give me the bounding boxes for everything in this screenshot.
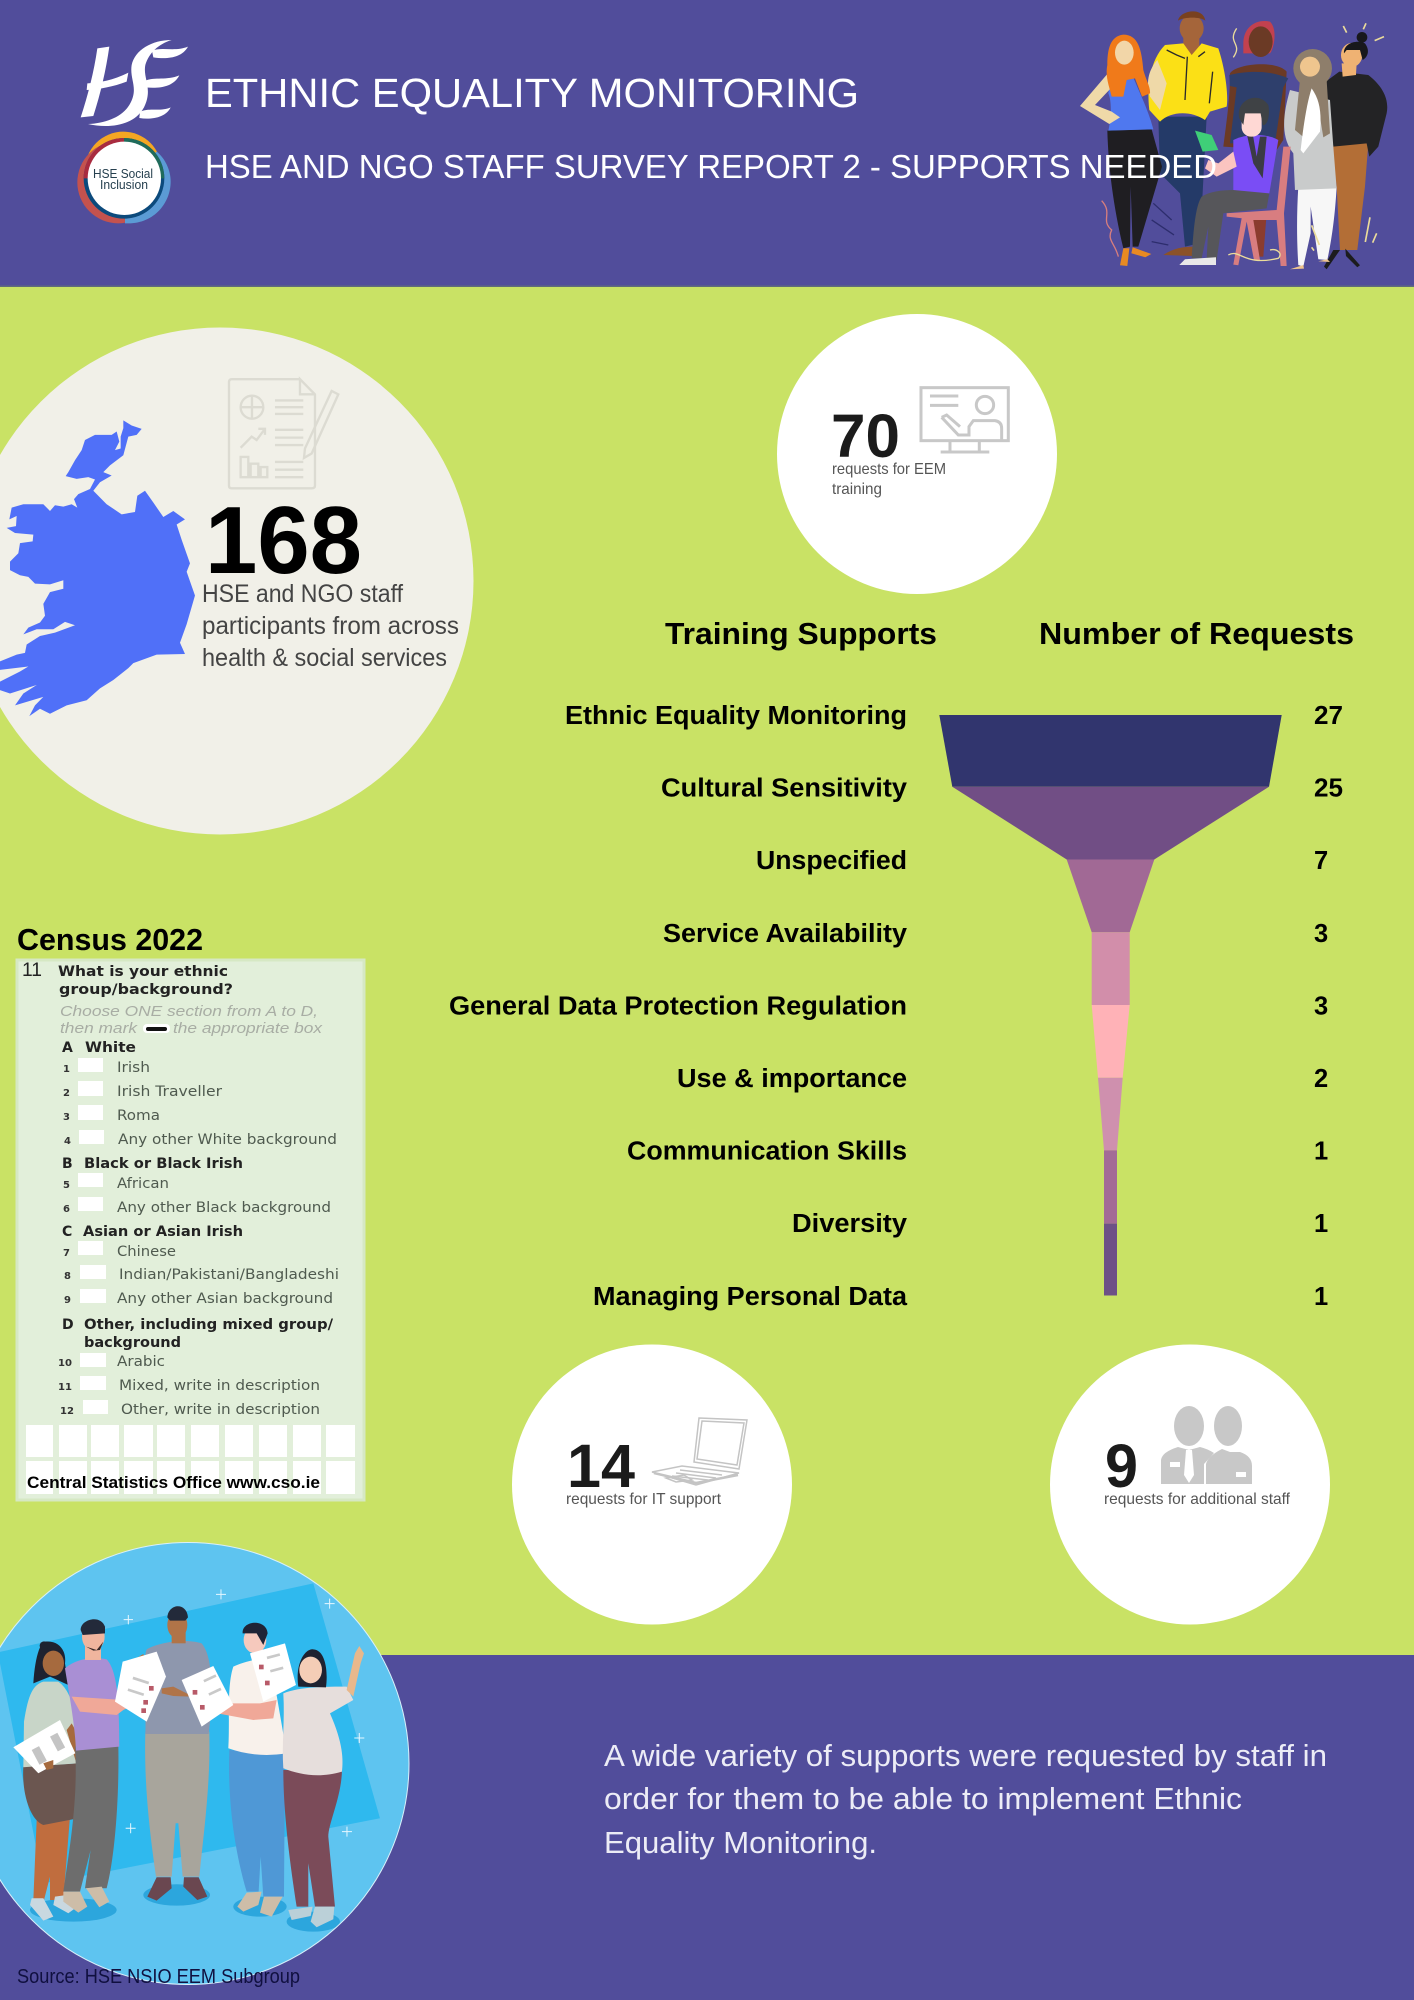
description [202,580,459,672]
section and option text: Irish Traveller [117,1084,222,1100]
question text: What is your ethnic [58,964,228,980]
description: health & social services [202,644,447,672]
circle background [1050,1344,1330,1624]
section and option text: 7 [63,1248,70,1259]
list of training support labels: Communication Skills [627,1138,907,1166]
figure: woman in hijab [1284,49,1337,269]
circle background [512,1344,792,1624]
section and option text: A [62,1040,73,1056]
question text [58,964,323,1037]
panel: 14 requests for IT support [512,1344,792,1624]
request counts: 2 [1314,1065,1328,1093]
big number 168: 168 [205,487,362,594]
source note: Source: HSE NSIO EEM Subgroup [17,1966,300,1988]
person: man with beard [63,1619,126,1913]
request counts: 1 [1314,1283,1328,1311]
list of training support labels: Service Availability [663,920,908,948]
person: woman raising arm [283,1646,364,1927]
icon: HSE Social Inclusion logo: Inclusion [100,177,148,192]
description: requests for IT support [566,1491,722,1508]
description: participants from across [202,612,459,640]
list of training support labels: General Data Protection Regulation [449,992,907,1020]
section and option text: 10 [58,1358,72,1369]
figure: seated person on chair [1179,98,1291,266]
icon: HSE Social Inclusion logo: HSE Social [93,166,153,181]
section and option text: 8 [64,1271,71,1282]
section and option text: 1 [63,1064,70,1075]
person: woman far left [13,1641,82,1921]
figure: woman with orange hair [1080,35,1167,266]
icon: laptop [652,1418,747,1485]
panel: census form [17,960,364,1500]
icon: HSE logo [81,40,188,126]
figure: man in black top [1323,23,1387,269]
description: requests for additional staff [1104,1491,1291,1508]
section and option text: C [62,1224,72,1240]
panel: 9 requests for additional staff [1050,1344,1330,1624]
section and option text [58,1040,339,1418]
header band [0,0,1414,287]
list of training support labels: Cultural Sensitivity [661,775,908,803]
big number 70: 70 [831,402,900,470]
panel: 70 requests for EEM training [777,314,1057,594]
big number 14: 14 [567,1432,635,1500]
section and option text: 9 [64,1295,71,1306]
question text: Choose ONE section from A to D, [60,1003,318,1020]
survey papers [115,1643,296,1727]
section and option text: 12 [60,1406,74,1417]
figure: woman in red dress [1223,21,1288,257]
description: HSE and NGO staff [202,580,403,608]
request counts: 27 [1314,702,1343,730]
sparkles [124,1589,364,1837]
icon: report document [229,379,338,488]
person: man in centre [133,1606,212,1901]
question text: group/background? [59,982,233,998]
list of training support labels: Ethnic Equality Monitoring [565,702,907,730]
icon: HSE Social Inclusion logo [77,132,171,223]
request counts: 3 [1314,992,1328,1020]
section and option text: Irish [117,1060,150,1076]
section and option text: background [84,1335,181,1351]
illustration: survey group in circle [0,1542,410,1985]
section and option text: 6 [63,1204,70,1215]
heading: Census 2022: Census 2022 [17,922,203,957]
answer boxes [78,1058,108,1414]
section and option text: Other, write in description [121,1402,320,1418]
big number 9: 9 [1105,1432,1138,1500]
section and option text: Any other Asian background [117,1291,333,1307]
request counts: 3 [1314,920,1328,948]
section and option text: D [62,1317,74,1333]
question number: 11 [22,960,42,981]
section and option text: B [62,1156,73,1172]
description: requests for EEM [832,461,946,478]
section and option text: 4 [64,1136,71,1147]
section and option text: Mixed, write in description [119,1378,320,1394]
question text: then mark [60,1020,139,1037]
conclusion text [604,1738,1327,1860]
conclusion text: Equality Monitoring. [604,1825,877,1860]
request counts [1314,702,1343,1311]
title: ETHNIC EQUALITY MONITORING [205,70,859,116]
funnel chart [939,715,1282,1296]
person: man in white shirt [220,1622,285,1916]
icon: two staff members [1161,1406,1252,1484]
section and option text: Black or Black Irish [84,1156,243,1172]
section and option text: 2 [63,1088,70,1099]
list of training support labels: Managing Personal Data [593,1283,908,1311]
section and option text: 5 [63,1180,70,1191]
map of Ireland [0,420,195,716]
request counts: 7 [1314,847,1328,875]
decorative squiggles [1102,28,1319,261]
request counts: 1 [1314,1138,1328,1166]
section and option text: Arabic [117,1354,165,1370]
conclusion text: order for them to be able to implement Ethnic [604,1781,1242,1816]
section and option text: African [117,1176,169,1192]
illustration: header group of people [1080,11,1387,269]
panel: 168 participants [0,328,474,834]
section and option text: Asian or Asian Irish [83,1224,243,1240]
section and option text: Any other Black background [117,1200,331,1216]
list of training support labels: Diversity [792,1210,908,1238]
section and option text: Roma [117,1108,160,1124]
circle background [0,328,474,834]
list of training support labels: Unspecified [756,847,907,875]
section and option text: Indian/Pakistani/Bangladeshi [119,1267,339,1283]
section and option text: White [85,1040,136,1056]
section and option text: Other, including mixed group/ [84,1317,334,1333]
section and option text: 11 [58,1382,72,1393]
write-in grid [26,1425,355,1494]
footer band [0,1655,1414,2000]
conclusion text: A wide variety of supports were requested by staff in [604,1738,1327,1773]
icon: presenter on screen [921,388,1008,452]
list of training support labels: Use & importance [677,1065,907,1093]
figure: man in yellow shirt [1148,11,1227,256]
column heading: Number of Requests: Number of Requests [1039,616,1354,651]
request counts: 1 [1314,1210,1328,1238]
question text: the appropriate box [173,1020,323,1037]
subtitle: HSE AND NGO STAFF SURVEY REPORT 2 - SUPPORTS NEEDED [205,148,1217,185]
credit: Central Statistics Office www.cso.ie [27,1473,320,1492]
section and option text: 3 [63,1112,70,1123]
section and option text: Chinese [117,1244,176,1260]
description [832,461,946,498]
request counts: 25 [1314,775,1343,803]
list of training support labels [449,702,908,1311]
description: training [832,481,882,498]
section and option text: Any other White background [118,1132,337,1148]
shadows [30,1884,340,1932]
circle background [777,314,1057,594]
column heading: Training Supports: Training Supports [665,616,937,651]
form background [17,960,364,1500]
